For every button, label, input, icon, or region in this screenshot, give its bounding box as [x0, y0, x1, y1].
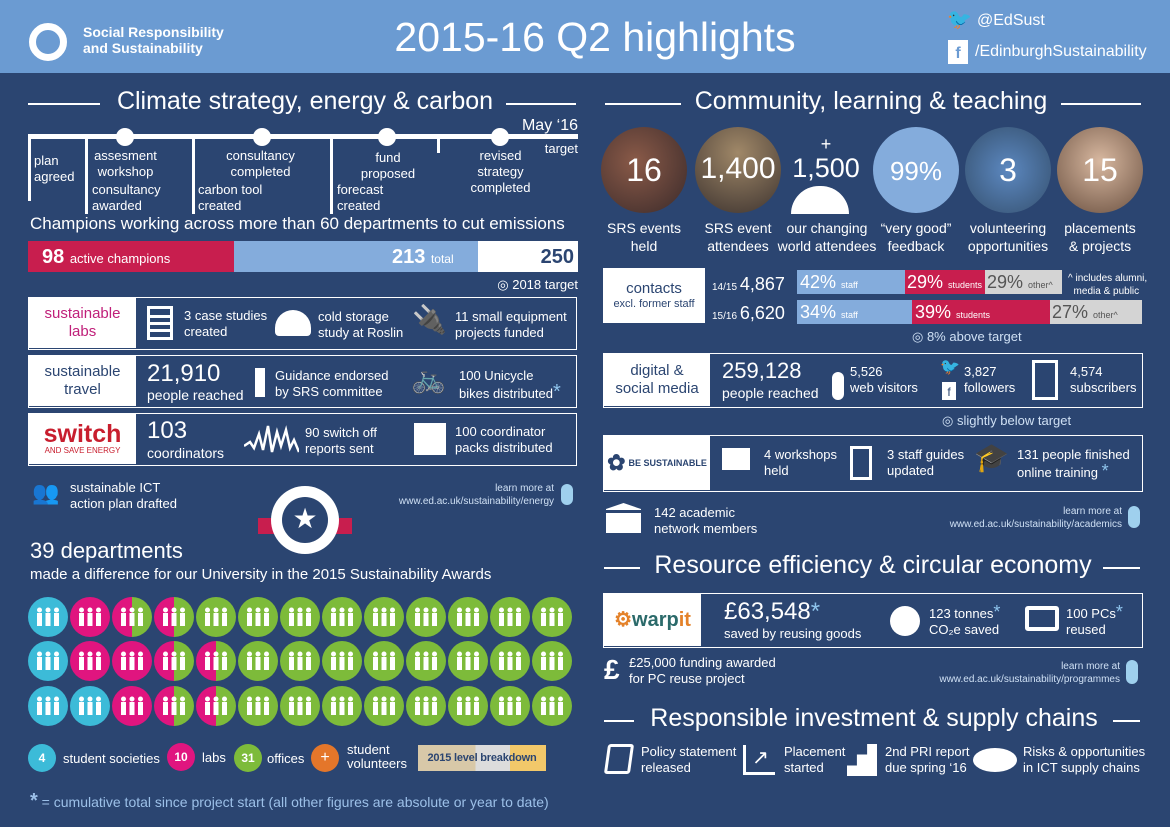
twitter handle: @EdSust: [977, 12, 1045, 29]
panel: warpit: 123 tonnes*: [929, 602, 1000, 622]
icon: mouse: [561, 484, 573, 505]
row 3: [28, 686, 572, 726]
panel: warpit: ⚙warpit: [614, 609, 691, 631]
timeline: proposed: [361, 166, 415, 181]
legend: +: [320, 749, 330, 766]
panel: sustainable labs: labs: [69, 323, 96, 340]
panel: digital: web visitors: [850, 380, 918, 395]
panel: digital: subscribers: [1070, 380, 1136, 395]
panel: digital: 4,574: [1070, 364, 1103, 379]
legend: labs: [202, 750, 226, 765]
timeline: carbon tool: [198, 182, 262, 197]
investment items: [604, 744, 1145, 776]
panel: contacts: ^ includes alumni,: [1068, 273, 1147, 284]
panel: switch: coordinators: [147, 445, 224, 461]
panel: digital: 259,128: [722, 358, 802, 383]
panel: digital: 5,526: [850, 364, 883, 379]
title: 2015-16 Q2 highlights: [394, 14, 796, 60]
panel: warpit: 100 PCs*: [1066, 602, 1123, 622]
panel: sustainable travel: sustainable: [45, 363, 120, 380]
heading: resource: Resource efficiency & circular economy: [654, 551, 1092, 579]
stats circles: SRS event: [705, 220, 771, 236]
panel: switch: reports sent: [305, 441, 374, 456]
panel: digital: f: [947, 385, 951, 399]
panel: sustainable labs: projects funded: [455, 325, 544, 340]
below target: ◎ slightly below target: [942, 413, 1071, 428]
heading: community: Community, learning & teaching: [695, 87, 1047, 115]
panel: sustainable labs: 🔌: [412, 304, 447, 335]
panel: warpit: reused: [1066, 622, 1106, 637]
panel: be sustainable: 3 staff guides: [887, 447, 964, 462]
investment items: due spring ‘16: [885, 760, 967, 775]
stats circles: volunteering: [970, 220, 1046, 236]
stats circles: 15: [1082, 152, 1118, 188]
panel: be sustainable: 131 people finished: [1017, 447, 1130, 462]
stats circles: 1,400: [700, 152, 776, 185]
timeline: assesment: [94, 148, 157, 163]
timeline: created: [337, 198, 380, 213]
panel: warpit: CO₂e saved: [929, 622, 999, 637]
learn more academics: learn more at: [1063, 506, 1122, 517]
legend: 4: [39, 751, 45, 765]
panel: digital: [603, 353, 1143, 408]
learn more programmes: [939, 661, 1120, 685]
panel: contacts: 29% students: [907, 272, 982, 292]
timeline: [28, 117, 578, 214]
panel: switch: AND SAVE ENERGY: [45, 446, 120, 455]
timeline: target: [545, 141, 578, 156]
sustainable ICT: action plan drafted: [70, 496, 177, 511]
panel: sustainable travel: 100 Unicycle: [459, 368, 533, 383]
facebook handle: /EdinburghSustainability: [975, 43, 1147, 60]
learn more academics: www.ed.ac.uk/sustainability/academics: [950, 519, 1122, 530]
panel: contacts: media & public: [1074, 286, 1139, 297]
funding: for PC reuse project: [629, 671, 745, 686]
panel: digital: 🐦: [940, 359, 960, 376]
panel: sustainable travel: 🚲: [411, 363, 446, 394]
timeline: consultancy: [92, 182, 161, 197]
panel: sustainable travel: bikes distributed*: [459, 381, 561, 403]
learn more energy: www.ed.ac.uk/sustainability/energy: [399, 496, 554, 507]
footnote: * = cumulative total since project start (all other figures are absolute or year to date): [30, 790, 549, 812]
panel: switch: 90 switch off: [305, 425, 377, 440]
timeline: strategy: [477, 164, 524, 179]
learn more energy: learn more at: [495, 483, 554, 494]
panel: contacts: 14/15 4,867: [712, 274, 785, 294]
panel: contacts: 42% staff: [800, 272, 858, 292]
legend: [28, 742, 546, 772]
timeline: agreed: [34, 169, 74, 184]
panel: warpit: saved by reusing goods: [724, 626, 861, 641]
above target: ◎ 8% above target: [912, 329, 1022, 344]
panel: be sustainable: held: [764, 463, 789, 478]
panel: warpit: [603, 593, 1143, 648]
timeline: consultancy: [226, 148, 295, 163]
logo text: and Sustainability: [83, 40, 203, 56]
panel: sustainable labs: study at Roslin: [318, 325, 403, 340]
timeline: May ‘16: [522, 117, 578, 134]
timeline: completed: [470, 180, 530, 195]
stats circles: & projects: [1069, 238, 1131, 254]
investment items: ↗: [752, 747, 769, 769]
stats circles: SRS events: [607, 220, 681, 236]
sustainable ICT: 👥: [32, 480, 59, 505]
timeline: fund: [375, 150, 401, 165]
panel: digital: people reached: [722, 385, 819, 401]
timeline: revised: [480, 148, 521, 163]
investment items: in ICT supply chains: [1023, 760, 1140, 775]
timeline: awarded: [92, 198, 142, 213]
panel: contacts: excl. former staff: [613, 298, 695, 310]
heading: investment: Responsible investment & supply chains: [650, 704, 1098, 732]
panel: sustainable labs: sustainable: [45, 305, 120, 322]
panel: be sustainable: updated: [887, 463, 934, 478]
legend: 31: [241, 751, 255, 765]
stats circles: our changing: [787, 220, 867, 236]
panel: sustainable travel: [28, 355, 577, 408]
investment items: Placement: [784, 744, 845, 759]
funding: [604, 654, 776, 686]
stats circles: 16: [626, 152, 662, 188]
panel: sustainable labs: 3 case studies: [184, 308, 267, 323]
stats circles: world attendees: [778, 238, 876, 254]
panel: be sustainable: BE SUSTAINABLE: [629, 458, 707, 468]
stats circles: 3: [999, 152, 1017, 188]
panel: be sustainable: 🎓: [974, 442, 1009, 473]
departments heading: 39 departments: [30, 538, 183, 563]
legend: student societies: [63, 751, 160, 766]
legend: student: [347, 742, 390, 757]
panel: switch: packs distributed: [455, 440, 553, 455]
champions bar: 213 total: [392, 246, 454, 268]
panel: sustainable travel: people reached: [147, 387, 244, 403]
panel: be sustainable: ✿: [607, 450, 626, 475]
2018 target: ◎ 2018 target: [497, 277, 578, 292]
timeline: completed: [230, 164, 290, 179]
funding: £: [604, 654, 620, 685]
stats circles: [601, 127, 1143, 254]
stats circles: “very good”: [881, 220, 951, 236]
panel: sustainable labs: created: [184, 324, 227, 339]
champions heading: Champions working across more than 60 departments to cut emissions: [30, 214, 565, 233]
academic network: 142 academic: [654, 505, 735, 520]
icon: awards badge: ★: [292, 503, 318, 534]
stats circles: feedback: [888, 238, 944, 254]
panel: contacts: 39% students: [915, 302, 990, 322]
learn more programmes: learn more at: [1061, 661, 1120, 672]
investment items: Policy statement: [641, 744, 736, 759]
logo text: Social Responsibility: [83, 24, 224, 40]
panel: warpit: £63,548*: [724, 598, 820, 625]
row 1: [28, 597, 572, 637]
legend: offices: [267, 751, 304, 766]
sustainable ICT: [32, 480, 177, 511]
logo ring: [29, 23, 67, 61]
legend: volunteers: [347, 756, 407, 771]
learn more academics: [950, 506, 1122, 530]
icon: awards badge: [258, 486, 352, 554]
panel: switch: 100 coordinator: [455, 424, 545, 439]
panel: contacts: 29% other^: [987, 272, 1053, 292]
stats circles: 99%: [890, 156, 942, 186]
stats circles: 1,500: [792, 153, 860, 183]
academic network: [606, 503, 757, 536]
legend: 2015 level breakdown: [427, 752, 537, 764]
panel: switch: 103: [147, 417, 187, 444]
panel: sustainable travel: 21,910: [147, 360, 220, 387]
heading: climate: Climate strategy, energy & carbon: [117, 87, 493, 115]
learn more energy: [398, 483, 554, 507]
panel: be sustainable: [603, 435, 1143, 492]
icon: facebook: [948, 40, 968, 64]
panel: sustainable travel: Guidance endorsed: [275, 368, 388, 383]
panel: sustainable travel: travel: [64, 381, 101, 398]
panel: digital: social media: [615, 380, 699, 397]
panel: digital: digital &: [630, 362, 684, 379]
panel: contacts: 34% staff: [800, 302, 858, 322]
chart: department circles: [28, 597, 572, 726]
investment items: Risks & opportunities: [1023, 744, 1145, 759]
logo text: [83, 24, 224, 56]
panel: switch: [28, 413, 577, 466]
header band: [0, 0, 1170, 73]
row 2: [28, 641, 572, 681]
panel: sustainable labs: [28, 297, 577, 350]
legend: 10: [174, 750, 188, 764]
champions bar: 250: [541, 246, 574, 268]
panel: sustainable labs: 11 small equipment: [455, 309, 567, 324]
learn more programmes: www.ed.ac.uk/sustainability/programmes: [939, 674, 1120, 685]
text: made a difference for our University in the 2015 Sustainability Awards: [30, 566, 491, 583]
stats circles: held: [631, 238, 657, 254]
stats circles: attendees: [707, 238, 769, 254]
panel: sustainable travel: by SRS committee: [275, 384, 383, 399]
panel: contacts: 15/16 6,620: [712, 303, 785, 323]
panel: contacts: [603, 268, 1147, 324]
investment items: started: [784, 760, 824, 775]
panel: be sustainable: online training *: [1017, 461, 1109, 481]
panel: digital: followers: [964, 380, 1015, 395]
icon: twitter: 🐦: [947, 9, 972, 31]
panel: sustainable labs: cold storage: [318, 309, 389, 324]
panel: digital: 3,827: [964, 364, 997, 379]
panel: contacts: contacts: [626, 280, 682, 297]
panel: contacts: 27% other^: [1052, 302, 1118, 322]
stats circles: opportunities: [968, 238, 1048, 254]
icon: facebook: f: [955, 45, 961, 62]
investment items: 2nd PRI report: [885, 744, 970, 759]
academic network: network members: [654, 521, 757, 536]
panel: switch: switch: [44, 420, 121, 448]
timeline: forecast: [337, 182, 383, 197]
champions bar: [28, 241, 578, 272]
investment items: released: [641, 760, 691, 775]
timeline: created: [198, 198, 241, 213]
funding: £25,000 funding awarded: [629, 655, 776, 670]
stats circles: +: [821, 134, 831, 154]
sustainable ICT: sustainable ICT: [70, 480, 160, 495]
champions bar: 98 active champions: [42, 246, 170, 268]
timeline: workshop: [98, 164, 153, 179]
timeline: plan: [34, 153, 59, 168]
stats circles: placements: [1064, 220, 1136, 236]
panel: be sustainable: 4 workshops: [764, 447, 837, 462]
